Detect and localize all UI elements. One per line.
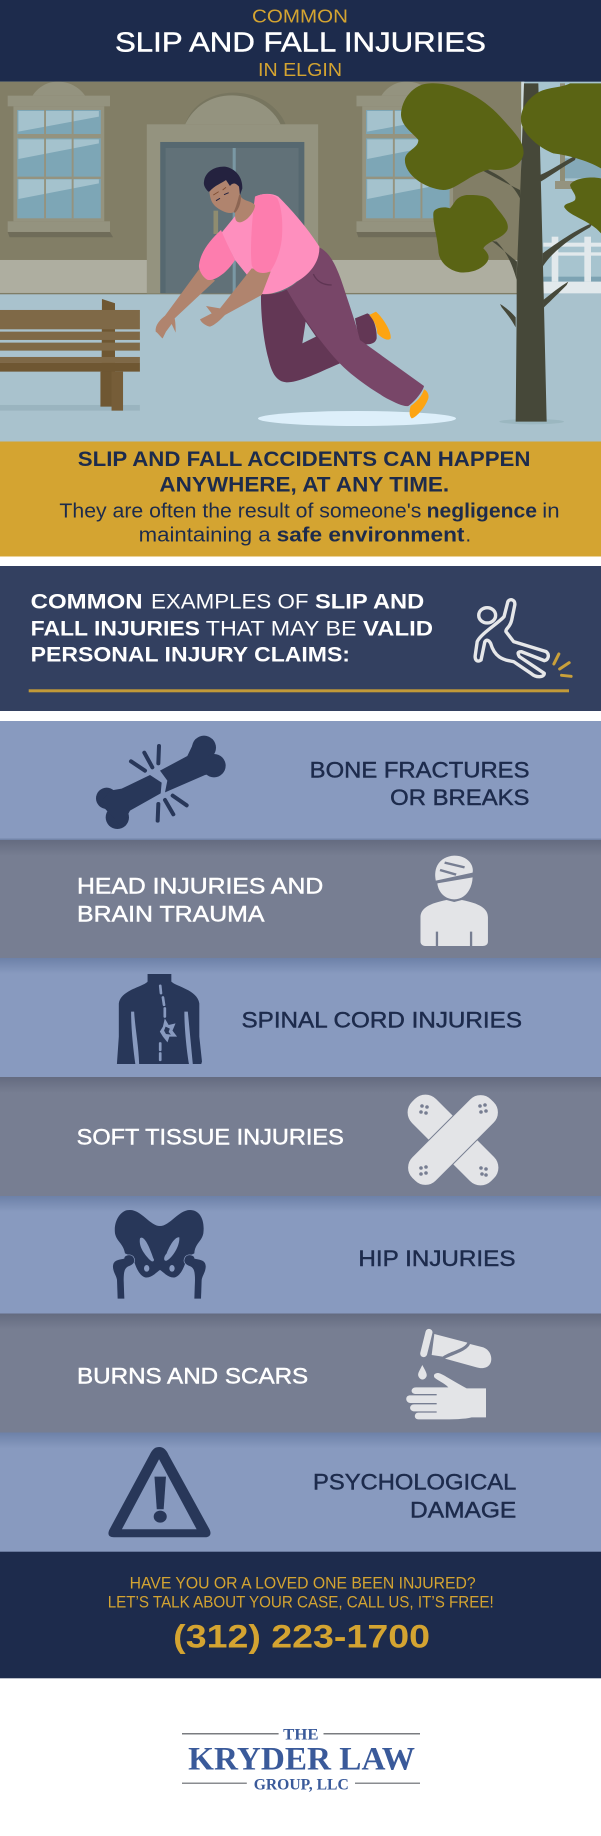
title banner <box>0 0 601 82</box>
gold intro band: ANYWHERE, AT ANY TIME. <box>159 474 449 497</box>
call to action footer: HAVE YOU OR A LOVED ONE BEEN INJURED? <box>130 1574 476 1593</box>
icon: broken bone <box>96 736 226 829</box>
call to action footer <box>0 1552 601 1678</box>
panel: common examples heading: VALID <box>363 618 433 641</box>
title banner: SLIP AND FALL INJURIES <box>115 27 486 58</box>
title banner: IN ELGIN <box>258 59 342 80</box>
row: psychological damage: DAMAGE <box>410 1498 516 1523</box>
row: burns and scars <box>0 1314 601 1432</box>
panel: common examples heading: THAT MAY BE <box>206 618 356 641</box>
logo: The Kryder Law Group: KRYDER LAW <box>188 1741 415 1777</box>
call to action footer: LET’S TALK ABOUT YOUR CASE, CALL US, IT’S FREE! <box>108 1593 494 1612</box>
logo: The Kryder Law Group: THE <box>283 1726 318 1743</box>
tree <box>401 83 601 424</box>
row: bone fractures: OR BREAKS <box>390 785 530 810</box>
logo: The Kryder Law Group <box>182 1726 420 1793</box>
panel: common examples heading: EXAMPLES OF <box>151 590 308 613</box>
building and ground background <box>0 82 601 442</box>
gold intro band <box>0 442 601 556</box>
gold intro band: They are often the result of someone's <box>59 500 421 522</box>
row: psychological damage: PSYCHOLOGICAL <box>313 1470 516 1495</box>
puddle <box>258 411 456 426</box>
gold intro band: negligence <box>427 500 537 522</box>
row: head injuries: HEAD INJURIES AND <box>77 873 323 898</box>
row: spinal cord injuries: SPINAL CORD INJURIES <box>242 1008 522 1033</box>
gold intro band: . <box>466 525 471 547</box>
row: head injuries: BRAIN TRAUMA <box>77 902 265 927</box>
gold intro band: in <box>542 500 560 522</box>
icon: falling person outline <box>475 600 571 677</box>
icon: chemical dripping on hand <box>406 1332 491 1419</box>
row: bone fractures <box>0 721 601 840</box>
gold intro band: maintaining a <box>139 525 272 547</box>
icon: injured spine <box>117 974 202 1064</box>
row: burns and scars: BURNS AND SCARS <box>77 1363 308 1388</box>
panel: common examples heading: SLIP AND <box>315 590 424 613</box>
row: spinal cord injuries <box>0 958 601 1077</box>
row: head injuries <box>0 840 601 958</box>
panel: common examples heading: COMMON <box>31 590 143 613</box>
icon: pelvis and hip bones <box>113 1210 206 1299</box>
icon: bandaged head <box>420 856 488 946</box>
bench <box>0 299 140 411</box>
panel: common examples heading <box>0 566 601 711</box>
hero illustration: man slipping outside a building <box>0 82 601 442</box>
row: soft tissue injuries <box>0 1077 601 1196</box>
panel: common examples heading: FALL INJURIES <box>31 618 200 641</box>
row: soft tissue injuries: SOFT TISSUE INJURIES <box>77 1124 344 1149</box>
gold intro band: safe environment <box>277 525 465 547</box>
logo: The Kryder Law Group: GROUP, LLC <box>254 1776 349 1793</box>
icon: warning triangle <box>108 1447 210 1537</box>
title banner: COMMON <box>252 6 348 27</box>
icon: crossed bandages <box>401 1088 505 1192</box>
row: hip injuries: HIP INJURIES <box>358 1246 516 1271</box>
gold intro band: SLIP AND FALL ACCIDENTS CAN HAPPEN <box>78 448 531 471</box>
panel: common examples heading: PERSONAL INJURY CLAIMS: <box>31 644 350 667</box>
falling man <box>156 167 429 418</box>
row: psychological damage <box>0 1432 601 1552</box>
call to action footer: (312) 223-1700 <box>173 1618 430 1655</box>
row: bone fractures: BONE FRACTURES <box>310 758 530 783</box>
row: hip injuries <box>0 1196 601 1314</box>
